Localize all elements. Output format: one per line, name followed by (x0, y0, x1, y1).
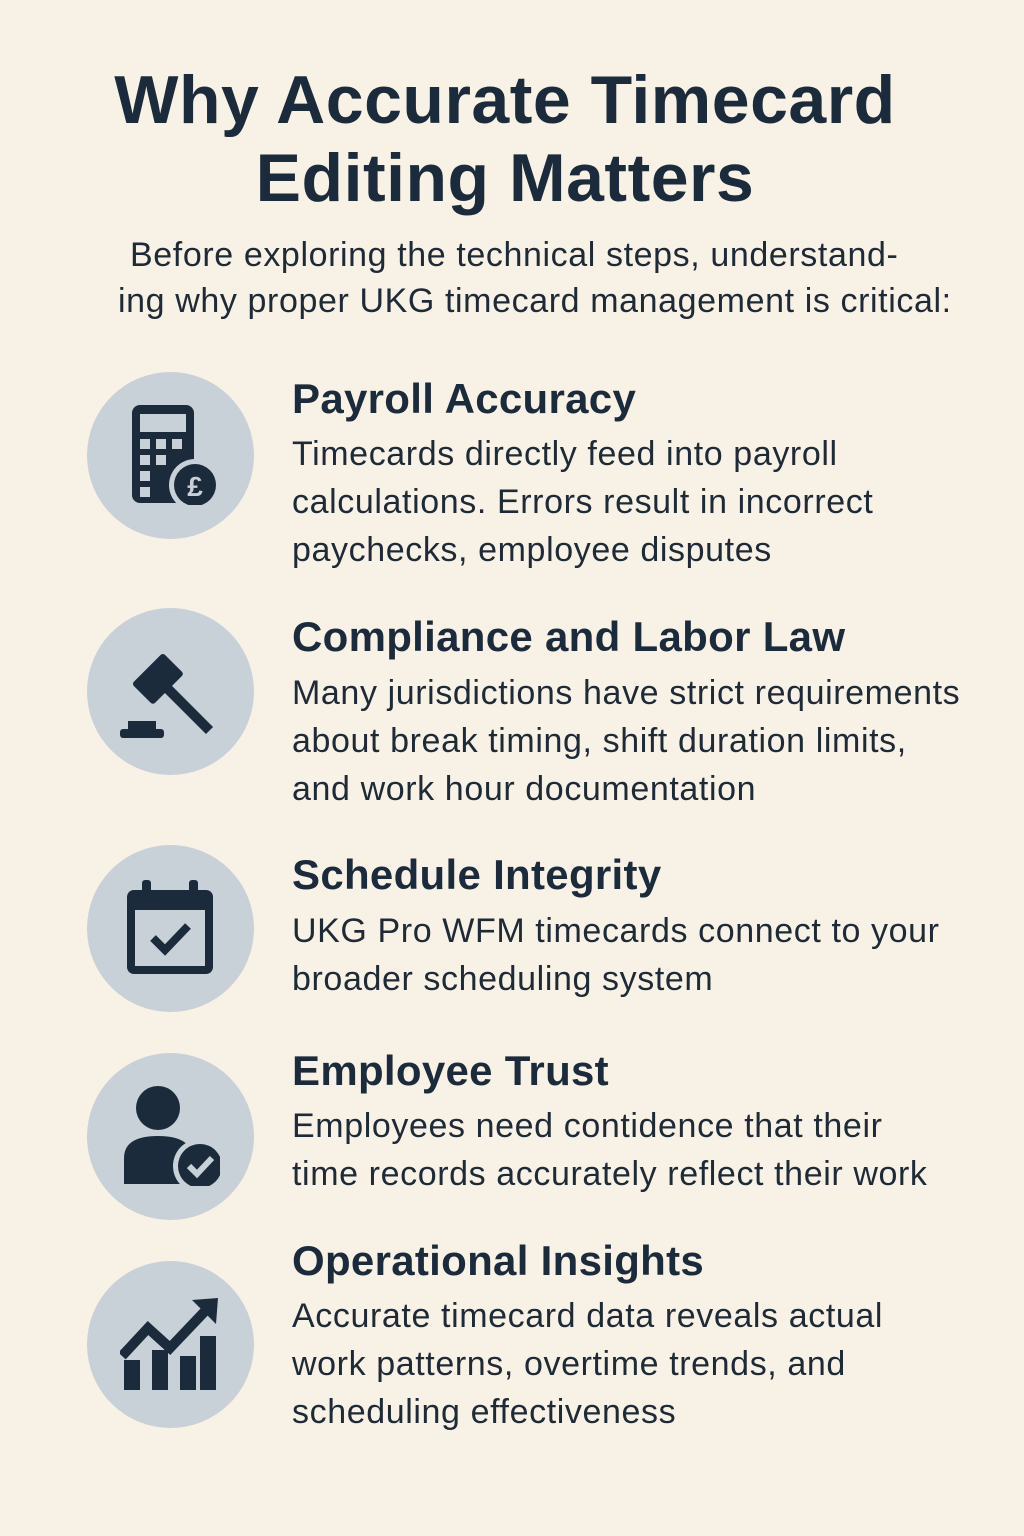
icon: bar chart with arrow (87, 1261, 254, 1428)
subtitle: ing why proper UKG timecard management is critical: (118, 282, 952, 320)
icon: calendar check (87, 845, 254, 1012)
body text (292, 912, 940, 998)
icon: person check (87, 1053, 254, 1220)
heading: Schedule Integrity (292, 851, 661, 898)
title (114, 62, 896, 216)
item: employee trust (87, 1047, 928, 1220)
body text (292, 435, 873, 569)
body text: paychecks, employee disputes (292, 531, 772, 569)
item: payroll accuracy (87, 372, 873, 569)
body text: Many jurisdictions have strict requirements (292, 674, 960, 712)
icon: calculator with pound: £ (187, 471, 203, 502)
subtitle (118, 236, 952, 320)
item: operational insights (87, 1237, 883, 1431)
body text: work patterns, overtime trends, and (292, 1345, 846, 1383)
body text: and work hour documentation (292, 770, 756, 808)
body text: calculations. Errors result in incorrect (292, 483, 873, 521)
body text: UKG Pro WFM timecards connect to your (292, 912, 940, 950)
body text: Timecards directly feed into payroll (292, 435, 838, 473)
item: schedule integrity (87, 845, 940, 1012)
subtitle: Before exploring the technical steps, understand- (130, 236, 898, 274)
title: Editing Matters (256, 140, 754, 216)
body text (292, 1297, 883, 1431)
title: Why Accurate Timecard (114, 62, 896, 138)
body text: time records accurately reflect their work (292, 1155, 928, 1193)
heading: Payroll Accuracy (292, 375, 636, 422)
icon: calculator with pound (87, 372, 254, 539)
icon: gavel (87, 608, 254, 775)
body text: Employees need contidence that their (292, 1107, 883, 1145)
body text (292, 1107, 928, 1193)
body text: Accurate timecard data reveals actual (292, 1297, 883, 1335)
item: compliance (87, 608, 960, 808)
heading: Employee Trust (292, 1047, 609, 1094)
body text: scheduling effectiveness (292, 1393, 676, 1431)
body text (292, 674, 960, 808)
heading: Compliance and Labor Law (292, 613, 845, 660)
body text: about break timing, shift duration limits, (292, 722, 907, 760)
body text: broader scheduling system (292, 960, 713, 998)
heading: Operational Insights (292, 1237, 704, 1284)
